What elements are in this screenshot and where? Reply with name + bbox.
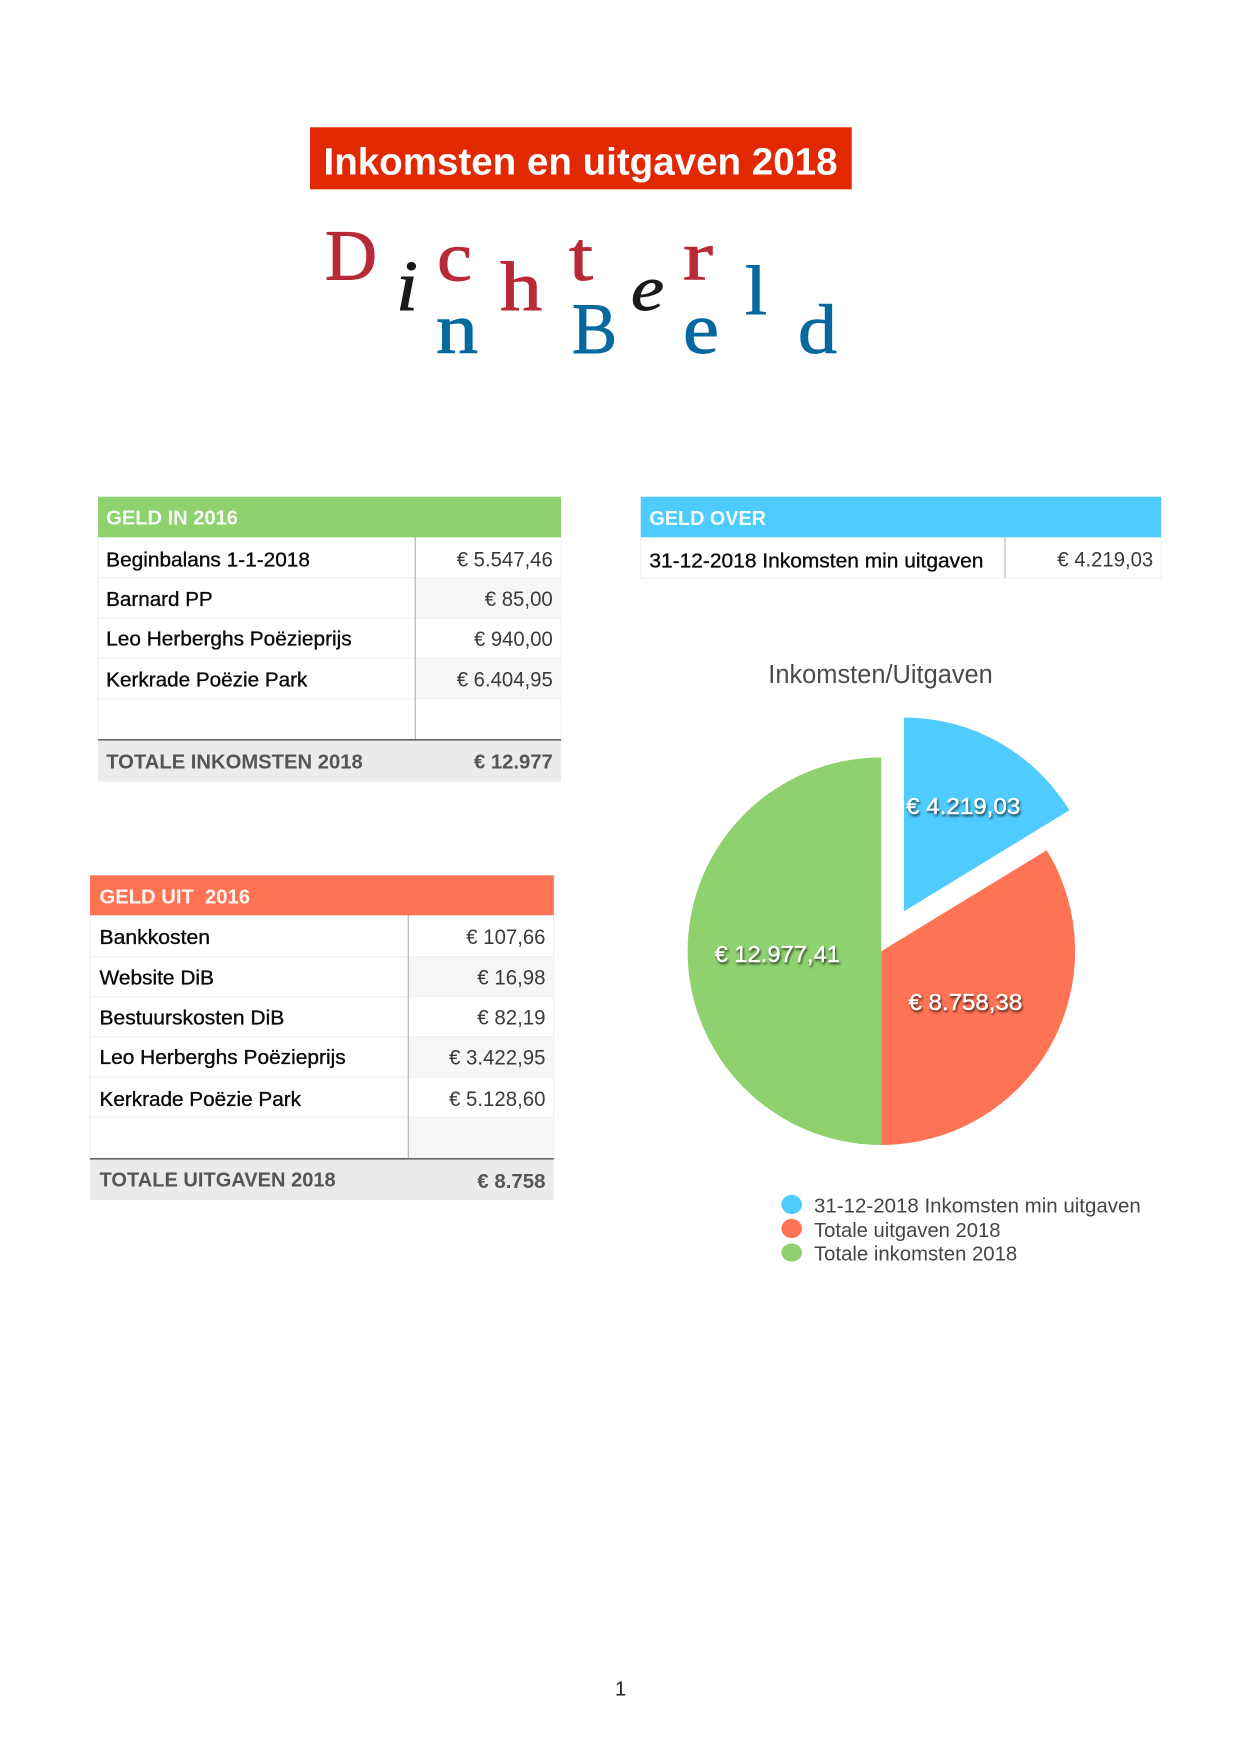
logo: Dichter in Beeld: t: [569, 219, 594, 296]
logo: Dichter in Beeld: h: [500, 249, 542, 326]
rows: geld uit: Kerkrade Poëzie Park: [100, 1088, 302, 1111]
rows: geld in: € 940,00: [474, 628, 553, 651]
rows: geld in: € 85,00: [485, 588, 553, 611]
total: geld in: € 12.977: [474, 751, 553, 774]
title banner: Inkomsten en uitgaven 2018: [324, 141, 838, 183]
logo: Dichter in Beeld: [325, 216, 837, 369]
title banner: [310, 127, 852, 189]
header: geld over: GELD OVER: [649, 507, 766, 530]
slice: totale inkomsten: [688, 757, 881, 1145]
logo: Dichter in Beeld: D: [325, 216, 377, 296]
rows: geld uit: € 5.128,60: [449, 1088, 546, 1111]
logo: Dichter in Beeld: n: [436, 289, 478, 369]
chart legend: 31-12-2018 Inkomsten min uitgaven: [814, 1194, 1141, 1218]
panel: geld in table: [98, 497, 561, 782]
logo: Dichter in Beeld: B: [572, 289, 617, 369]
logo: Dichter in Beeld: l: [745, 253, 767, 330]
rows: geld uit: € 16,98: [477, 967, 546, 990]
header: geld uit: [90, 875, 554, 915]
label: 8.758,38: € 8.758,38: [908, 989, 1022, 1015]
header: geld over: [641, 497, 1161, 537]
rows: geld uit: Bestuurskosten DiB: [100, 1007, 284, 1030]
rows: geld uit: Website DiB: [100, 967, 214, 990]
slice: totale uitgaven: [881, 850, 1075, 1145]
pie chart: [688, 718, 1075, 1145]
panel: geld uit table: [90, 875, 554, 1200]
logo: Dichter in Beeld: d: [798, 292, 837, 369]
header: geld uit: GELD UIT 2016: [100, 885, 250, 908]
total: geld in: [98, 739, 561, 782]
row: geld over: 31-12-2018 Inkomsten min uitgaven: [649, 549, 983, 572]
chart title: Inkomsten/Uitgaven: [768, 661, 993, 689]
rows: geld in: Barnard PP: [106, 588, 213, 611]
rows: geld uit: € 3.422,95: [449, 1047, 546, 1070]
logo: Dichter in Beeld: r: [683, 218, 713, 296]
rows: geld in: Kerkrade Poëzie Park: [106, 669, 308, 692]
logo: Dichter in Beeld: i: [396, 246, 418, 326]
rows: geld uit: € 107,66: [466, 926, 546, 949]
rows: geld uit: € 82,19: [477, 1007, 546, 1030]
rows: geld in: € 6.404,95: [457, 669, 553, 692]
slice: geld over (exploded): [904, 718, 1069, 911]
page number: 1: [615, 1679, 626, 1701]
rows: geld in: Beginbalans 1-1-2018: [106, 549, 310, 572]
header: geld in: GELD IN 2016: [106, 506, 238, 529]
rows: geld uit: Bankkosten: [100, 926, 210, 949]
logo: Dichter in Beeld: c: [437, 220, 472, 296]
rows: geld in: [106, 549, 553, 692]
row: geld over: [649, 549, 1153, 572]
logo: Dichter in Beeld: e: [631, 253, 664, 324]
total: geld in: TOTALE INKOMSTEN 2018: [106, 751, 363, 774]
label: 4.219,03: € 4.219,03: [906, 793, 1020, 819]
chart legend: Totale inkomsten 2018: [814, 1242, 1017, 1265]
rows: geld in: € 5.547,46: [457, 549, 553, 572]
rows: geld in: Leo Herberghs Poëzieprijs: [106, 628, 352, 651]
panel: geld over table: [641, 497, 1161, 578]
rows: geld uit: [100, 926, 546, 1111]
rows: geld uit: Leo Herberghs Poëzieprijs: [100, 1046, 346, 1069]
row: geld over: € 4.219,03: [1057, 549, 1153, 572]
chart legend: Totale uitgaven 2018: [814, 1219, 1000, 1242]
total: geld uit: [90, 1158, 554, 1200]
logo: Dichter in Beeld: e: [683, 289, 719, 369]
chart legend: [781, 1194, 1141, 1265]
total: geld uit: € 8.758: [477, 1170, 546, 1193]
header: geld in: [98, 497, 561, 537]
label: 12.977,41: € 12.977,41: [714, 941, 840, 967]
total: geld uit: TOTALE UITGAVEN 2018: [100, 1168, 336, 1192]
